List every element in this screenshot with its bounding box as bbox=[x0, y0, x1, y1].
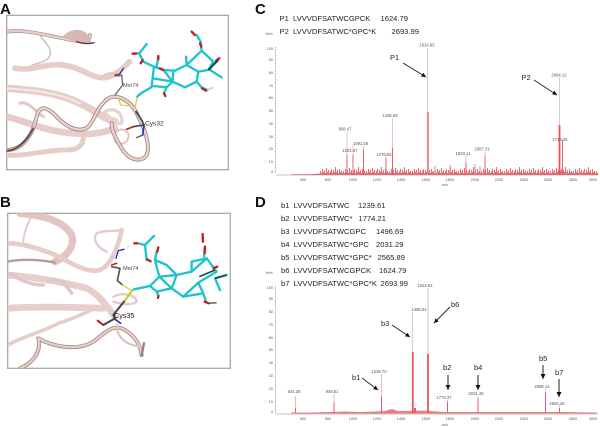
x axis D: 1400 bbox=[397, 417, 405, 421]
arrow b1 bbox=[352, 373, 378, 390]
y axis C: 40 bbox=[269, 122, 273, 126]
peptide list D: b5 LVVVDFSATWC*GPC* bbox=[281, 253, 372, 262]
y axis D: 60 bbox=[269, 336, 273, 340]
panel A: protein structure with Cys32 bbox=[7, 15, 228, 170]
x axis C: 1200 bbox=[373, 178, 381, 182]
peak labels D: 544.36 bbox=[288, 389, 301, 394]
ligand sticks bbox=[134, 236, 227, 302]
peptide list D: b1 LVVVDFSATWC bbox=[281, 201, 350, 210]
y axis D: 0 bbox=[271, 410, 273, 414]
arrow b6 bbox=[434, 300, 459, 323]
x axis C: 800 bbox=[325, 178, 331, 182]
peak labels C: 1001.57 bbox=[342, 148, 358, 153]
peptide list D: 1774.21 bbox=[358, 214, 386, 223]
x axis C: 2600 bbox=[544, 178, 552, 182]
noise baseline D bbox=[291, 409, 597, 414]
peptide list D: 2031.29 bbox=[376, 240, 403, 249]
peptide list D: 1239.61 bbox=[358, 201, 385, 210]
x axis C: 1600 bbox=[422, 178, 430, 182]
peak labels D: 1774.37 bbox=[436, 395, 452, 400]
x axis C bbox=[276, 175, 598, 187]
chart D: mass spectrum bbox=[267, 283, 598, 427]
panel label C: C bbox=[255, 1, 266, 18]
arrow b1: b1 bbox=[352, 373, 360, 382]
peptide list C: 1624.79 bbox=[380, 14, 408, 23]
y axis D: 80 bbox=[269, 310, 273, 314]
x axis C: m/z bbox=[442, 183, 448, 187]
peaks C bbox=[347, 48, 562, 175]
y axis D: 100 bbox=[267, 286, 273, 290]
x axis D: 2800 bbox=[569, 417, 577, 421]
ligand oxygens bbox=[134, 234, 217, 303]
peptide list D: 1624.79 bbox=[379, 266, 406, 275]
peak labels C: 2694.12 bbox=[551, 72, 567, 78]
peak labels C: 1933.11 bbox=[456, 151, 471, 156]
x axis D: 2600 bbox=[544, 417, 552, 421]
x axis D: 800 bbox=[325, 417, 331, 421]
panel label D: D bbox=[255, 194, 266, 211]
arrow b5 bbox=[539, 354, 547, 379]
x axis C: 2200 bbox=[495, 178, 503, 182]
x axis C: 2800 bbox=[569, 178, 577, 182]
x axis C: 600 bbox=[300, 178, 306, 182]
peak labels C bbox=[339, 42, 568, 157]
y axis label D: %Int. bbox=[265, 271, 274, 275]
arrow b7 bbox=[555, 368, 563, 397]
x axis D: 3000 bbox=[589, 417, 597, 421]
peak labels D: 2694.26 bbox=[549, 401, 565, 406]
chart C: mass spectrum bbox=[267, 42, 598, 187]
label Cys32: Cys32 bbox=[145, 120, 164, 128]
peak labels D: 2031.48 bbox=[468, 391, 484, 396]
peptide list D: 2565.89 bbox=[378, 253, 405, 262]
y axis C: 90 bbox=[269, 58, 273, 62]
y axis D bbox=[267, 286, 276, 414]
x axis C: 3000 bbox=[589, 178, 597, 182]
noise baseline C bbox=[290, 164, 598, 175]
peptide list C: 2693.99 bbox=[392, 27, 419, 36]
peak labels C: 2719.35 bbox=[552, 137, 568, 142]
y axis label C: %Int. bbox=[265, 32, 274, 36]
ligand oxygens bbox=[133, 32, 219, 96]
arrow b4 bbox=[474, 363, 482, 390]
peptide list D: b2 LVVVDFSATWC* bbox=[281, 214, 352, 223]
label Met74: Met74 bbox=[123, 266, 139, 272]
peak labels D: 1624.94 bbox=[417, 283, 433, 288]
arrow b5: b5 bbox=[539, 354, 547, 363]
peptide list C: P2 LVVVDFSATWC*GPC*K bbox=[280, 27, 376, 36]
peak labels D: 849.51 bbox=[326, 389, 339, 394]
residue sticks Met74 and Cys32 bbox=[115, 68, 144, 138]
peak labels D: 1496.62 bbox=[411, 307, 427, 312]
arrow b6: b6 bbox=[451, 300, 459, 309]
arrow P2 bbox=[522, 73, 557, 95]
panel B: protein structure with Cys35 bbox=[8, 213, 230, 368]
x axis C: 1400 bbox=[397, 178, 405, 182]
peak labels C: 1624.85 bbox=[419, 42, 435, 48]
peptide list C bbox=[280, 14, 419, 36]
label Cys35: Cys35 bbox=[114, 311, 134, 320]
label Met74: Met74 bbox=[123, 83, 139, 89]
peak labels C: 908.47 bbox=[339, 126, 352, 132]
arrow b7: b7 bbox=[555, 368, 563, 377]
panel label B: B bbox=[0, 194, 11, 211]
peptide list D: 2693.99 bbox=[380, 279, 408, 288]
arrow b2: b2 bbox=[443, 363, 451, 372]
peptide list D: b3 LVVVDFSATWCGPC bbox=[281, 227, 366, 236]
peak labels D bbox=[288, 283, 565, 406]
peptide list D bbox=[281, 201, 408, 288]
y axis C: 0 bbox=[271, 170, 273, 174]
y axis D: 50 bbox=[269, 348, 273, 352]
peptide list D: b4 LVVVDFSATWC*GPC bbox=[281, 240, 369, 249]
y axis C: 80 bbox=[269, 71, 273, 75]
arrow P2: P2 bbox=[522, 73, 531, 82]
x axis D: 1600 bbox=[422, 417, 430, 421]
y axis C: 100 bbox=[267, 47, 273, 51]
peak labels C: 1276.65 bbox=[376, 152, 392, 157]
y axis D: 30 bbox=[269, 374, 273, 378]
y axis C: 50 bbox=[269, 109, 273, 113]
peak labels C: 1091.58 bbox=[353, 141, 369, 146]
residue sticks Met74 and Cys35 bbox=[98, 244, 133, 325]
arrow b2 bbox=[443, 363, 451, 390]
x axis D bbox=[276, 414, 598, 427]
protein ribbons bbox=[7, 30, 148, 160]
peak labels C: 1336.68 bbox=[382, 113, 398, 118]
peptide list D: b7 LVVVDFSATWC*GPC*K bbox=[281, 279, 377, 288]
peak labels C: 2087.31 bbox=[474, 146, 490, 152]
x axis C: 1000 bbox=[349, 178, 357, 182]
peak labels D: 1239.70 bbox=[371, 369, 387, 374]
panel label A: A bbox=[0, 1, 11, 18]
x axis D: 2200 bbox=[495, 417, 503, 421]
y axis D: 70 bbox=[269, 323, 273, 327]
y axis C: 20 bbox=[269, 147, 273, 151]
x axis D: 1200 bbox=[373, 417, 381, 421]
arrow P1 bbox=[390, 53, 426, 77]
y axis C: 30 bbox=[269, 135, 273, 139]
y axis D: 90 bbox=[269, 297, 273, 301]
y axis D: 40 bbox=[269, 361, 273, 365]
x axis D: 2000 bbox=[471, 417, 479, 421]
y axis C: 10 bbox=[269, 160, 273, 164]
peptide list D: b6 LVVVDFSATWCGPCK bbox=[281, 266, 371, 275]
y axis C: 60 bbox=[269, 96, 273, 100]
arrow b4: b4 bbox=[474, 363, 482, 372]
x axis D: 600 bbox=[300, 417, 306, 421]
x axis C: 2000 bbox=[471, 178, 479, 182]
arrow b3 bbox=[381, 319, 410, 337]
protein ribbons bbox=[8, 213, 144, 368]
peaks D bbox=[296, 288, 560, 413]
arrow b3: b3 bbox=[381, 319, 389, 328]
y axis C: 70 bbox=[269, 84, 273, 88]
x axis D: 1800 bbox=[446, 417, 454, 421]
peptide list D: 1496.69 bbox=[376, 227, 403, 236]
x axis C: 1800 bbox=[446, 178, 454, 182]
y axis D: 20 bbox=[269, 387, 273, 391]
y axis D: 10 bbox=[269, 400, 273, 404]
peptide list C: P1 LVVVDFSATWCGPCK bbox=[280, 14, 370, 23]
peak labels D: 2566.14 bbox=[534, 384, 550, 389]
arrow P1: P1 bbox=[390, 53, 399, 62]
x axis D: 2400 bbox=[520, 417, 528, 421]
y axis C bbox=[267, 47, 276, 174]
x axis D: 1000 bbox=[349, 417, 357, 421]
x axis C: 2400 bbox=[520, 178, 528, 182]
ligand sticks bbox=[135, 35, 222, 97]
x axis D: m/z bbox=[442, 423, 448, 427]
